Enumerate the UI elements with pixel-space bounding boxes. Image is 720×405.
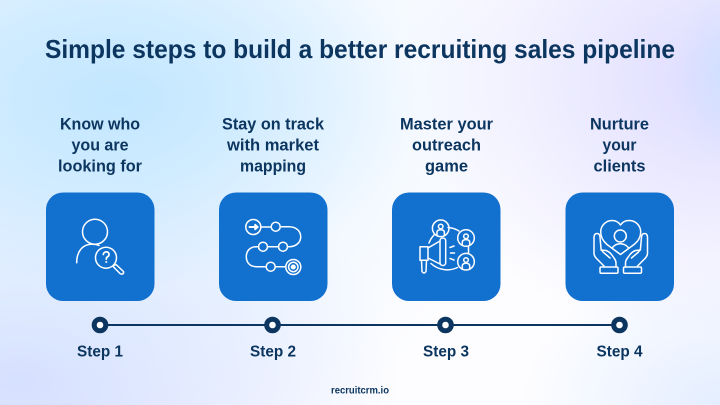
heading: step 2: Stay on track [222,114,325,134]
heading: step 3: game [425,156,468,176]
icon: market map route [246,220,301,274]
timeline [94,319,625,331]
heading: step 3: outreach [412,136,481,154]
panel: step 2 card [219,192,328,301]
label: step 3: Step 3 [423,344,469,360]
heading: step 1: you are [72,136,128,154]
timeline marker 3 [440,319,451,331]
heading: step 4: clients [594,156,646,176]
label: step 4: Step 4 [596,344,643,360]
timeline marker 4 [614,319,625,331]
heading: step 2: with market [226,136,319,154]
heading: step 2 [222,114,325,176]
panel: step 4 card [566,192,674,301]
label: step 2: Step 2 [250,344,296,360]
icon: person with magnifier [77,219,124,274]
heading: step 2: mapping [240,156,306,176]
heading: step 4 [590,114,649,176]
heading: step 1: looking for [58,156,142,176]
heading: step 3: Master your [400,114,493,134]
icon: megaphone and contacts [420,220,474,273]
heading: step 1: Know who [60,114,140,134]
icon: hands holding heart [594,220,648,273]
heading: step 1 [58,114,142,176]
timeline marker 2 [267,319,278,331]
panel: step 3 card [392,192,500,301]
heading: step 4: Nurture [590,114,649,134]
label: step 1: Step 1 [77,344,123,360]
heading: step 3 [400,114,493,176]
heading: step 4: your [602,136,637,154]
footer: recruitcrm.io [331,384,389,396]
title: Simple steps to build a better recruiting sales pipeline [45,34,675,64]
timeline marker 1 [94,319,106,331]
panel: step 1 card [46,192,154,301]
